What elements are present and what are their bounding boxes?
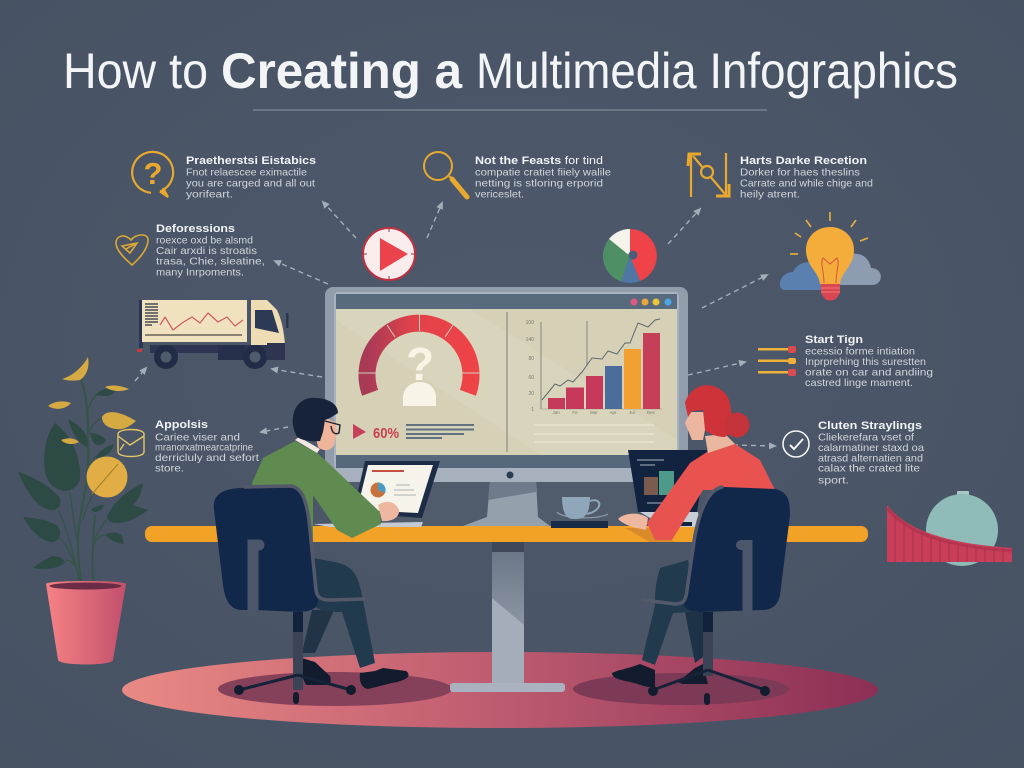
plant pot — [46, 581, 126, 664]
text: Start Tign: castred linge mament. — [805, 377, 913, 389]
text: Start Tign: orate on car and andiing — [805, 366, 933, 378]
text: Praetherstsi Eistabics: yorifeart. — [186, 188, 233, 200]
icon: heart — [116, 235, 148, 265]
man chair — [214, 486, 364, 704]
bar and line chart: 140 — [526, 337, 534, 343]
text: Deforessions: many Inrpoments. — [156, 266, 244, 278]
text: Not the Feasts: netting is stloring erporid — [475, 178, 603, 190]
man head — [293, 398, 340, 453]
text: Appolsis: Appolsis — [155, 419, 208, 431]
title: How to — [63, 43, 208, 99]
bar and line chart: Fe — [572, 410, 578, 415]
icon: light bulb with clouds — [780, 212, 881, 300]
person: woman in red jacket — [612, 385, 790, 705]
woman legs — [642, 560, 703, 665]
man hand — [378, 502, 399, 521]
person: man in green jacket — [214, 398, 440, 704]
bar and line chart: Apr — [609, 410, 617, 415]
text: Harts Darke Recetion: Dorker for haes theslins — [740, 166, 860, 178]
dark leaves — [18, 388, 148, 569]
floor ellipse — [122, 652, 878, 728]
icon: play button clock — [363, 228, 415, 280]
text: Start Tign: Start Tign — [805, 334, 863, 346]
bar and line chart: 20 — [528, 391, 534, 397]
woman head — [685, 385, 750, 453]
bar and line chart: 1 — [531, 407, 534, 413]
text: Appolsis: mranorxatmearcatprine — [155, 442, 253, 454]
yellow leaves — [48, 357, 136, 498]
bar and line chart: 100 — [526, 320, 534, 326]
text: Appolsis: Cariee viser and — [155, 432, 240, 444]
text: Praetherstsi Eistabics: you are carged and all out — [186, 178, 315, 190]
text: Cluten Straylings — [818, 420, 924, 486]
text: Cluten Straylings: Cliekerefara vset of — [818, 432, 914, 444]
woman hand — [618, 514, 648, 530]
desk pillar — [450, 542, 565, 692]
gauge chart — [358, 314, 481, 406]
bar and line chart: Jul — [629, 410, 635, 415]
man laptop — [313, 461, 440, 527]
monitor — [325, 287, 688, 528]
bar and line chart: Jan — [552, 410, 560, 415]
text: Start Tign — [805, 334, 933, 389]
text: Deforessions: roexce oxd be alsmd — [156, 234, 253, 246]
percentage stat — [353, 424, 474, 442]
text: Start Tign: Inprprehing this surestten — [805, 356, 926, 368]
monitor window buttons — [630, 298, 672, 306]
text: Start Tign: ecessio forme intiation — [805, 346, 915, 358]
icon: arrows and node — [688, 153, 729, 197]
woman chair — [643, 487, 790, 705]
plant stems — [58, 377, 108, 588]
bar and line chart: 80 — [528, 356, 534, 362]
icon: truck — [137, 300, 288, 369]
plant — [18, 357, 148, 588]
man shoes — [301, 658, 409, 689]
gauge chart: ? — [406, 338, 434, 390]
bar and line chart: Dec — [647, 410, 656, 415]
text: Praetherstsi Eistabics: Praetherstsi Eistabics — [186, 155, 316, 167]
bar and line chart: 60 — [528, 375, 534, 381]
woman laptop — [628, 450, 707, 527]
icon: sliders — [758, 346, 796, 376]
text: Deforessions: trasa, Chie, sleatine, — [156, 256, 265, 268]
bar and line chart: Mar — [590, 410, 598, 415]
icon: magnifier — [424, 152, 467, 197]
woman hand shadow on desk — [625, 528, 675, 542]
text: Deforessions: Deforessions — [156, 223, 235, 235]
text: Deforessions — [156, 223, 265, 278]
dashed arrows — [135, 202, 775, 446]
text: Not the Feasts: compatie cratiet fiiely walile — [475, 166, 611, 178]
title: Multimedia Infographics — [476, 43, 958, 99]
globe and red curve — [887, 491, 1012, 566]
icon: question bubble — [132, 152, 173, 197]
text: Cluten Straylings: atrasd alternatien and — [818, 452, 923, 464]
text: Harts Darke Recetion — [740, 155, 873, 200]
desk top — [145, 526, 868, 542]
text: Harts Darke Recetion: heily atrent. — [740, 188, 800, 200]
title: Creating a — [221, 43, 463, 99]
text: Harts Darke Recetion: Harts Darke Recetion — [740, 155, 867, 167]
text: Appolsis: store. — [155, 462, 184, 474]
icon: question bubble: ? — [144, 156, 162, 191]
text: Praetherstsi Eistabics — [186, 155, 316, 200]
title — [63, 43, 958, 99]
text: Cluten Straylings: sport. — [818, 474, 849, 486]
icon: cup outline — [118, 430, 144, 456]
text: Cluten Straylings: calarmatiner staxd oa — [818, 442, 924, 454]
text: Deforessions: Cair arxdi is stroatis — [156, 245, 257, 257]
woman jacket — [647, 444, 775, 540]
bar and line chart — [526, 319, 662, 442]
text: Harts Darke Recetion: Carrate and while chige and — [740, 178, 873, 190]
text: Not the Feasts: vericeslet. — [475, 188, 524, 200]
coffee cup — [551, 497, 608, 528]
text: Praetherstsi Eistabics: Fnot relaescee eximactile — [186, 166, 307, 178]
man jacket — [252, 441, 381, 560]
text: Appolsis: derricluly and sefort — [155, 452, 259, 464]
percentage stat: 60% — [373, 425, 399, 442]
text: Not the Feasts — [475, 155, 611, 200]
woman shoes — [612, 664, 708, 687]
text: Not the Feasts: Not the Feasts for tind — [475, 155, 603, 167]
text: Cluten Straylings: calax the crated lite — [818, 462, 920, 474]
icon: pie chart — [603, 229, 657, 283]
text: Cluten Straylings: Cluten Straylings — [818, 420, 922, 432]
man legs — [302, 558, 375, 668]
icon: check circle — [783, 431, 809, 457]
text: Appolsis — [155, 419, 259, 474]
